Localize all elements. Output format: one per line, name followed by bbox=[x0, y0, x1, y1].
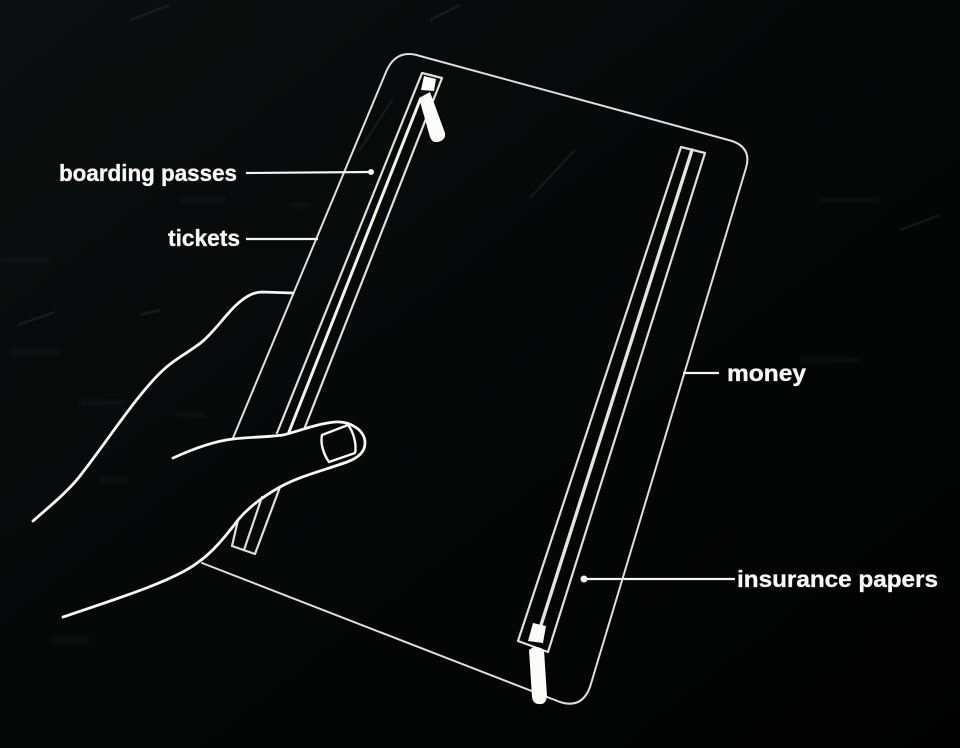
fingers outline bbox=[33, 292, 293, 521]
thumb and palm outline bbox=[63, 422, 365, 617]
right zipper bbox=[518, 147, 705, 652]
icon: bottom zipper pull bbox=[528, 623, 547, 704]
thumbnail bbox=[321, 425, 356, 462]
illustration: hand bbox=[33, 292, 365, 617]
card outline bbox=[202, 54, 747, 704]
label: insurance papers bbox=[580, 566, 938, 592]
label: money: money bbox=[727, 360, 806, 386]
label: tickets: tickets bbox=[168, 225, 240, 251]
label: insurance papers: insurance papers bbox=[737, 566, 938, 592]
label: boarding passes bbox=[59, 160, 374, 186]
label: boarding passes: boarding passes bbox=[59, 160, 237, 186]
label: money bbox=[683, 360, 806, 386]
illustration: document holder card bbox=[202, 54, 747, 704]
icon: top zipper pull bbox=[419, 76, 445, 142]
left zipper bbox=[232, 73, 442, 554]
